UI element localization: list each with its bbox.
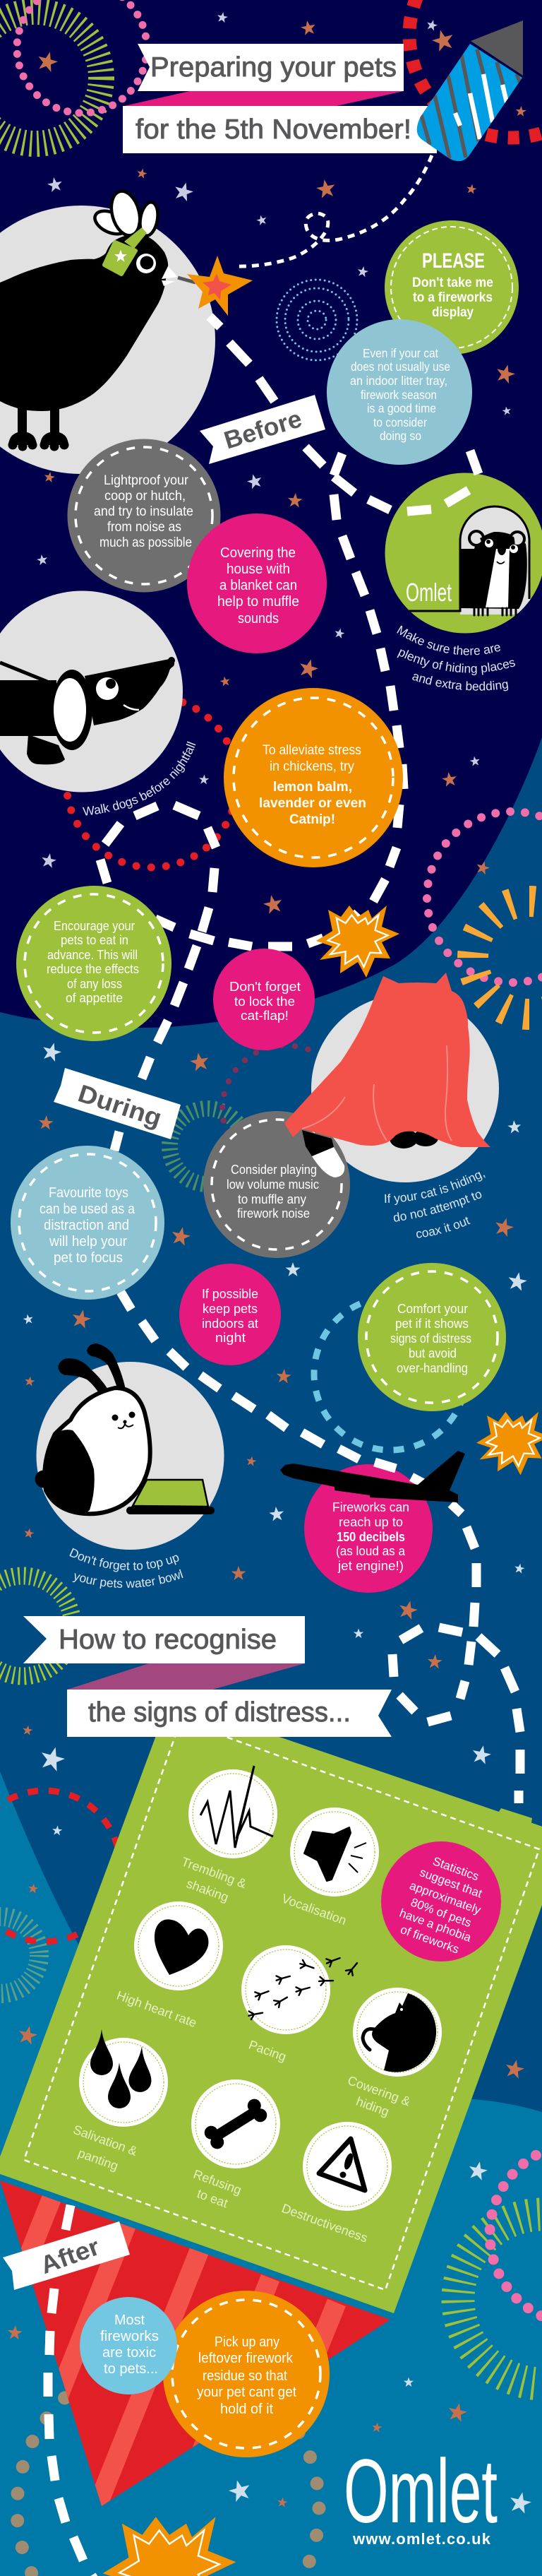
caption: cat hiding: If your cat is hiding,: [385, 1171, 486, 1205]
tip: eat in advance: of any loss: [67, 977, 122, 991]
tip: eat in advance: Encourage your: [54, 919, 135, 933]
caption: hiding places: and extra bedding: [412, 674, 508, 691]
caption: hiding places: Make sure there are: [397, 626, 501, 655]
tip: please: Don't take me: [412, 275, 493, 290]
tip: favourite toys: [11, 1146, 164, 1300]
tip: pick up residue: your pet cant get: [197, 2385, 296, 2400]
tip: please: [385, 220, 519, 355]
tip: comfort your pet: pet if it shows: [395, 1317, 469, 1331]
blanket: [284, 973, 490, 1147]
tip: keep pets indoors: keep pets: [203, 1302, 258, 1316]
dog character: [0, 657, 175, 764]
callout: statistics: [381, 1841, 501, 1961]
tip: low volume music: [203, 1111, 350, 1258]
tip text: fireworks decibels: reach up to: [339, 1515, 403, 1529]
tip: favourite toys: Favourite toys: [49, 1185, 128, 1201]
tip: lock the cat flap: to lock the: [234, 995, 295, 1009]
sign: vocalisation: [279, 1808, 379, 1928]
tip: indoor litter tray: to consider: [373, 415, 427, 429]
sign: high heart rate: High heart rate: [115, 1988, 198, 2030]
tip: cover the house: help to muffle: [217, 594, 299, 610]
pink tip bubble behind route: fireworks loudness: [304, 1464, 433, 1593]
tip: indoor litter tray: does not usually use: [351, 360, 450, 374]
heading banner: signs of distress: How to recognise: [59, 1625, 277, 1655]
heading banner: signs of distress: [23, 1616, 392, 1737]
dog panel: [0, 590, 183, 793]
caption: cat hiding: coax it out: [416, 1216, 471, 1238]
icon: rocket: [417, 20, 523, 161]
sign: cowering and hiding: [346, 1988, 442, 2119]
sign: destructiveness: Destructiveness: [279, 2201, 370, 2245]
tip: comfort your pet: Comfort your: [397, 1302, 468, 1316]
sign: salivation and panting: Salivation &: [71, 2123, 139, 2159]
rabbit tail: [35, 1471, 52, 1488]
callout: statistics: approximately: [408, 1879, 483, 1917]
paws: [390, 1129, 418, 1148]
tip: calming herbs: [224, 688, 403, 867]
tip: eat in advance: reduce the effects: [47, 962, 139, 976]
dashed blue ring behind comfort tip: [314, 1298, 466, 1450]
callout: statistics: have a phobia: [397, 1906, 474, 1945]
sign: refusing to eat: to eat: [195, 2186, 230, 2210]
heading banner: signs of distress: the signs of distress...: [88, 1697, 351, 1728]
tip: lightproof coop: from noise as: [107, 520, 181, 535]
tip text: fireworks decibels: jet engine!): [337, 1559, 404, 1573]
cat under blanket: [284, 973, 490, 1177]
starburst: middle: [316, 906, 399, 978]
tip: favourite toys: pet to focus: [54, 1250, 123, 1266]
during ribbon: During: [75, 1079, 165, 1132]
tip text: fireworks decibels: 150 decibels: [337, 1530, 405, 1544]
title banner: for the 5th November!: [136, 114, 411, 145]
sign: salivation and panting: panting: [76, 2146, 120, 2173]
fireworks: pink dotted ring and orange rays, mid right: [427, 812, 542, 1014]
small omlet logo: Omlet: [406, 578, 452, 607]
hamster character: [460, 531, 527, 615]
sign: trembling and shaking: Trembling &: [179, 1854, 248, 1891]
tip: eat in advance: [16, 886, 171, 1041]
tip: toxic fireworks: Most: [114, 2313, 145, 2328]
starburst: bottom: [103, 2517, 236, 2576]
rabbit panel: [35, 1343, 224, 1550]
tip: pick up residue: Pick up any: [215, 2334, 279, 2350]
sign: refusing to eat: [191, 2079, 280, 2210]
tip: indoor litter tray: doing so: [380, 429, 421, 443]
tip: cover the house: house with: [227, 562, 290, 577]
tip: eat in advance: pets to eat in: [61, 933, 128, 947]
signs panel: [0, 1699, 542, 2313]
tip: lightproof coop: [68, 439, 220, 592]
tip: indoor litter tray: an indoor litter tray,: [350, 374, 447, 388]
chicken moon disc: [0, 206, 215, 474]
starburst: right: [476, 1412, 542, 1476]
dashed route line: [48, 316, 520, 2576]
tip: comfort your pet: signs of distress: [390, 1331, 471, 1346]
after ribbon: [3, 2221, 130, 2290]
before ribbon: [200, 395, 325, 464]
sign: destructiveness: [279, 2122, 392, 2245]
tip: cover the house: Covering the: [220, 545, 296, 561]
fireworks: red dotted ring behind dog: [66, 696, 237, 867]
caption: cat hiding: do not attempt to: [394, 1192, 481, 1222]
tip: favourite toys: distraction and: [44, 1218, 129, 1233]
sign: pacing: Pacing: [247, 2038, 288, 2064]
red rocket cone: [0, 2180, 390, 2529]
tip: indoor litter tray: firework season: [361, 388, 437, 402]
legs and feet: [8, 408, 69, 451]
title banner: Preparing your pets: [150, 52, 397, 83]
fuse and thin dashed trail from rocket: [235, 155, 432, 266]
fireworks: red dashed ring top right: [409, 0, 542, 138]
tip text: fireworks decibels: (as loud as a: [336, 1544, 406, 1558]
tip: toxic fireworks: [80, 2297, 177, 2394]
tip: please: display: [432, 305, 474, 320]
title banner: [123, 44, 437, 153]
tip: keep pets indoors: If possible: [202, 1287, 258, 1301]
sparkler: [178, 278, 195, 283]
tip: pick up residue: [163, 2291, 330, 2457]
tip: calming herbs: Catnip!: [289, 812, 335, 827]
rabbit ears: [58, 1358, 108, 1393]
sign: salivation and panting: [71, 2029, 168, 2173]
tip: low volume music: low volume music: [227, 1177, 319, 1192]
fireworks: blue dotted rings: [277, 280, 357, 360]
caption: walk dogs: Walk dogs before nightfall: [82, 742, 196, 815]
callout: statistics: of fireworks: [399, 1923, 461, 1957]
tip: low volume music: firework noise: [237, 1206, 310, 1221]
caption: cat hiding: [385, 1171, 486, 1238]
body: [0, 235, 168, 411]
tip: cover the house: [187, 514, 327, 653]
fireworks: lower left rays: [0, 1576, 73, 1676]
hamster panel: [385, 473, 542, 633]
tip: favourite toys: will help your: [49, 1234, 127, 1250]
sign: trembling and shaking: shaking: [184, 1876, 231, 1904]
tip: calming herbs: in chickens, try: [270, 759, 354, 774]
fireworks: lower right burst: [458, 2144, 542, 2384]
tail: [302, 1130, 334, 1156]
tip: calming herbs: To alleviate stress: [263, 743, 361, 758]
sign: cowering and hiding: Cowering &: [346, 2073, 412, 2109]
beak: [162, 266, 178, 279]
comb: [91, 188, 160, 239]
eye: [136, 254, 156, 273]
water bowl: [133, 1480, 208, 1507]
tip: keep pets indoors: indoors at: [202, 1317, 258, 1331]
caption: water bowl: Don't forget to top up: [69, 1548, 179, 1572]
fireworks: lower left muted rays and red ring: [0, 1791, 120, 1993]
callout: statistics: 80% of pets: [409, 1896, 473, 1930]
fireworks: brown dotted ring: [17, 2357, 319, 2576]
tip: please: PLEASE: [422, 249, 485, 273]
tip: toxic fireworks: fireworks: [100, 2329, 159, 2344]
tip: favourite toys: can be used as a: [40, 1201, 136, 1217]
tip: toxic fireworks: are toxic: [102, 2345, 156, 2361]
rabbit face: [112, 1414, 119, 1421]
fireworks: muted rings behind music tip: [169, 1045, 349, 1184]
tip: please: to a fireworks: [413, 290, 493, 305]
tip: comfort your pet: but avoid: [409, 1346, 457, 1360]
tip: lock the cat flap: cat-flap!: [241, 1009, 289, 1023]
during ribbon: [54, 1068, 181, 1139]
tip: indoor litter tray: [327, 319, 472, 465]
tip: lightproof coop: much as possible: [100, 535, 192, 550]
rabbit body: [44, 1388, 150, 1514]
before ribbon: Before: [221, 405, 305, 454]
tip: eat in advance: of appetite: [66, 991, 123, 1005]
tip: indoor litter tray: Even if your cat: [363, 346, 438, 360]
tip: comfort your pet: over-handling: [397, 1361, 468, 1375]
tip text: fireworks decibels: Fireworks can: [332, 1500, 409, 1514]
tip: lightproof coop: and try to insulate: [94, 504, 193, 519]
sign: refusing to eat: Refusing: [191, 2167, 243, 2197]
tip: cover the house: a blanket can: [219, 578, 297, 593]
tip: toxic fireworks: to pets...: [104, 2361, 158, 2377]
tip: cover the house: sounds: [238, 611, 279, 627]
headphones: [104, 227, 147, 274]
callout: statistics: suggest that: [418, 1865, 484, 1901]
tip: indoor litter tray: is a good time: [367, 401, 436, 415]
sign: trembling and shaking: [179, 1766, 277, 1904]
tip: keep pets indoors: night: [215, 1331, 246, 1345]
tip: comfort your pet: [358, 1263, 506, 1411]
caption: hiding places: [397, 626, 515, 691]
caption: hiding places: plenty of hiding places: [397, 649, 515, 675]
tip: lock the cat flap: [213, 949, 315, 1050]
tip: lightproof coop: coop or hutch,: [104, 489, 186, 504]
icon: jet plane: [280, 1451, 465, 1502]
tip: low volume music: Consider playing: [231, 1163, 317, 1177]
sign: pacing: [241, 1945, 360, 2064]
tip: lightproof coop: Lightproof your: [104, 473, 189, 488]
sign: cowering and hiding: hiding: [354, 2094, 391, 2119]
callout: statistics: Statistics: [431, 1854, 481, 1883]
tip: calming herbs: lavender or even: [259, 796, 366, 811]
tip: pick up residue: hold of it: [220, 2402, 273, 2417]
caption: water bowl: [69, 1548, 183, 1589]
cat panel: [311, 995, 499, 1182]
tip: low volume music: to muffle any: [238, 1192, 306, 1206]
tip: lock the cat flap: Don't forget: [229, 980, 301, 994]
tip: eat in advance: advance. This will: [47, 948, 138, 962]
tip: calming herbs: lemon balm,: [273, 780, 352, 795]
sign: high heart rate: [115, 1901, 223, 2030]
tip: pick up residue: leftover firework: [198, 2351, 294, 2366]
sign: vocalisation: Vocalisation: [279, 1892, 349, 1928]
tip: keep pets indoors: [179, 1264, 281, 1365]
fireworks: top left burst: [0, 0, 147, 144]
tip text: fireworks decibels: [332, 1500, 409, 1573]
website address: www.omlet.co.uk: [352, 2530, 491, 2548]
chicken character: [0, 188, 253, 451]
after ribbon: After: [37, 2233, 104, 2279]
tip: pick up residue: residue so that: [203, 2368, 287, 2384]
caption: water bowl: your pets water bowl: [72, 1569, 183, 1589]
